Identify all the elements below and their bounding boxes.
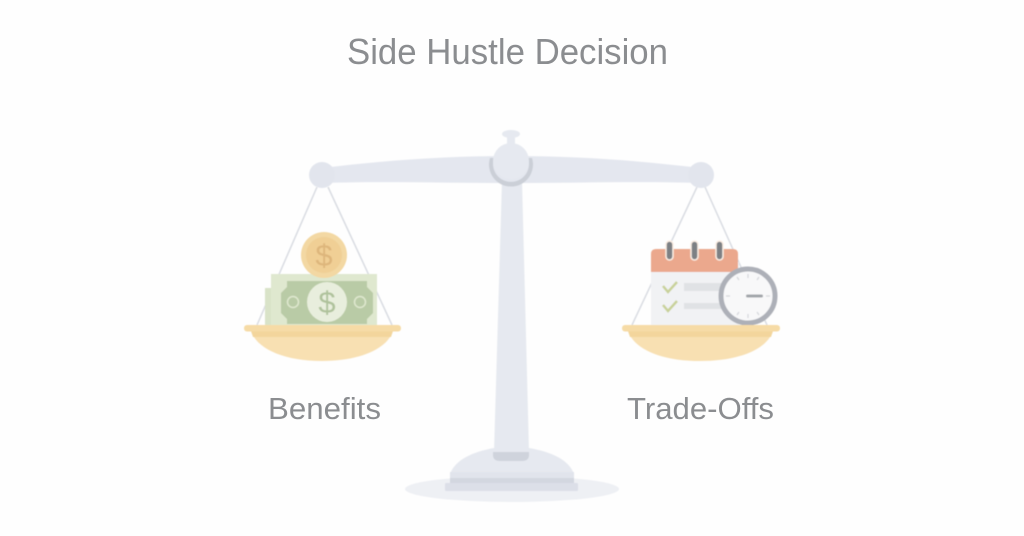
calendar rings: [666, 241, 723, 260]
banknote inner: [281, 281, 373, 324]
right strings: [632, 187, 767, 325]
banknote right dot: [354, 296, 366, 308]
base dome: [450, 448, 574, 474]
base shadow: [405, 476, 619, 502]
title: Side Hustle Decision: [347, 31, 668, 72]
finial cap: [502, 130, 520, 138]
base step shade: [450, 478, 574, 483]
right bowl shade: [628, 331, 773, 337]
label: benefits: Benefits: [268, 391, 381, 426]
base step: [450, 472, 574, 483]
clock: [721, 269, 775, 323]
left pan group: benefits: [244, 187, 401, 361]
base plate: [445, 483, 578, 491]
banknote dollar sign: $: [318, 285, 336, 320]
pillar: [494, 180, 529, 452]
beam: [322, 156, 701, 183]
task lines: [684, 283, 722, 309]
clock ticks: [726, 274, 770, 318]
coin inner: [306, 237, 342, 273]
right rim: [622, 325, 780, 332]
right bowl: [628, 331, 773, 361]
left beam end: [309, 162, 335, 188]
left bowl shade: [251, 331, 393, 337]
left rim: [244, 325, 401, 332]
banknote medallion: [307, 282, 347, 322]
balance scale structure: [309, 130, 714, 502]
left strings: [257, 187, 392, 325]
back bill: [265, 288, 277, 326]
clock hand: [746, 294, 763, 298]
banknote: [271, 274, 377, 325]
finial stem: [507, 136, 515, 146]
left bowl: [251, 331, 393, 361]
coin: [301, 232, 347, 278]
pivot hub: [493, 143, 529, 179]
banknote left dot: [288, 296, 298, 308]
check marks: [663, 282, 677, 311]
pivot ring: [489, 158, 533, 187]
label: trade-offs: Trade-Offs: [627, 391, 774, 426]
right beam end: [688, 162, 714, 188]
calendar header: [651, 249, 738, 272]
calendar page: [651, 262, 739, 325]
coin dollar sign: $: [315, 238, 333, 273]
right pan group: trade-offs: [622, 187, 780, 361]
pillar collar: [493, 452, 529, 461]
